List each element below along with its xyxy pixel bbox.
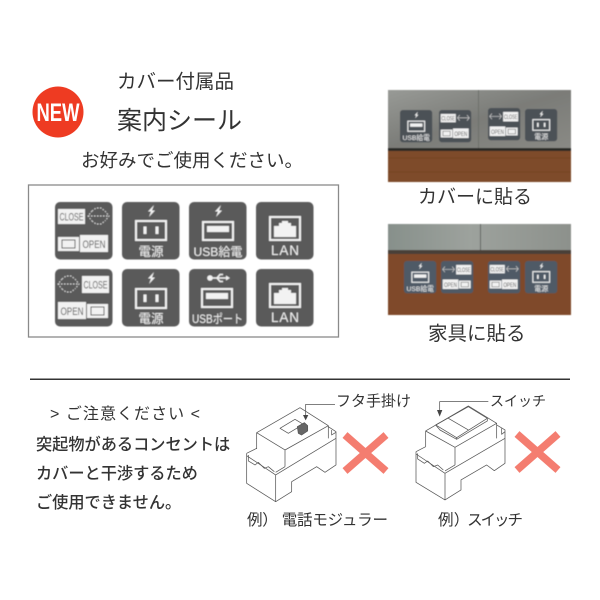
- sticker: close-left on cover: OPEN: [454, 131, 467, 138]
- caption: stick on cover: カバーに貼る: [418, 186, 532, 208]
- icon: USB port sticker: USBポート: [192, 312, 243, 326]
- icon: power sticker row 1: [122, 202, 180, 260]
- icon: close-left open-right sticker: OPEN: [82, 239, 106, 251]
- sticker: close-right on furniture: CLOSE: [457, 267, 470, 274]
- icon: close-left open-right sticker: [55, 202, 112, 260]
- photo: stickers on cover: [388, 90, 571, 182]
- sticker: close-right on furniture: [441, 261, 473, 293]
- icon: power sticker row 1: 電源: [138, 245, 164, 259]
- caption: telephone module example: 例） 電話モジュラー: [247, 511, 388, 529]
- icon: USB port sticker: [189, 269, 246, 326]
- heading: guide stickers: 案内シール: [117, 107, 242, 135]
- sticker: close-left on furniture: [488, 261, 520, 293]
- text: use as you like: お好みでご使用ください。: [81, 150, 303, 171]
- diagram: switch: [416, 402, 505, 500]
- sticker: power on furniture: 電源: [534, 284, 548, 293]
- label: lid finger catch: フタ手掛け: [336, 393, 411, 410]
- icon: red cross 2: [517, 434, 558, 470]
- sticker: USB power on cover: [400, 110, 432, 142]
- label: switch: スイッチ: [490, 393, 546, 409]
- icon: LAN sticker row 1: LAN: [271, 243, 299, 258]
- sticker: close-right on furniture: OPEN: [444, 282, 457, 289]
- icon: power sticker row 2: [122, 269, 180, 326]
- sticker: close-left on furniture: OPEN: [503, 282, 516, 289]
- icon: red cross 1: [345, 435, 386, 471]
- text: caution line 2: カバーと干渉するため: [36, 465, 198, 483]
- sticker: power on cover: 電源: [534, 132, 548, 141]
- sticker: close-left on cover: [439, 110, 471, 142]
- icon: close-left open-right sticker: CLOSE: [60, 212, 84, 224]
- heading: cover accessory: カバー付属品: [117, 71, 234, 93]
- panel: sticker sheet: [28, 185, 338, 337]
- sticker: close-left on furniture: CLOSE: [491, 266, 504, 273]
- sticker: close-right on cover: OPEN: [491, 129, 504, 136]
- sticker: USB power on furniture: [404, 261, 436, 293]
- icon: open-left close-right sticker: OPEN: [60, 306, 84, 318]
- sticker: power on furniture: [525, 261, 557, 293]
- icon: open-left close-right sticker: CLOSE: [84, 280, 108, 292]
- icon: LAN sticker row 2: LAN: [271, 310, 299, 325]
- text: caution line 1: 突起物があるコンセントは: [36, 435, 230, 454]
- icon: LAN sticker row 2: [256, 269, 314, 326]
- heading: caution: > ご注意ください <: [50, 405, 200, 423]
- sticker: close-right on cover: [488, 108, 520, 140]
- sticker: USB power on cover: USB給電: [403, 133, 430, 142]
- badge: NEW: [32, 86, 84, 138]
- icon: open-left close-right sticker: [55, 269, 112, 326]
- sticker: USB power on furniture: USB給電: [407, 284, 434, 293]
- sticker: power on cover: [525, 109, 557, 141]
- icon: USB power sticker: [189, 202, 246, 260]
- icon: USB power sticker: USB給電: [194, 245, 242, 259]
- text: caution line 3: ご使用できません。: [36, 494, 181, 512]
- sticker: close-right on cover: CLOSE: [504, 114, 517, 121]
- icon: LAN sticker row 1: [256, 202, 314, 260]
- caption: stick on furniture: 家具に貼る: [428, 323, 526, 345]
- diagram: phone module: [247, 404, 336, 502]
- caption: switch example: 例 ）スイッチ: [438, 511, 523, 529]
- badge: NEW: NEW: [36, 99, 80, 127]
- icon: power sticker row 2: 電源: [138, 312, 164, 326]
- photo: stickers on furniture: [388, 224, 571, 315]
- sticker: close-left on cover: CLOSE: [442, 115, 455, 122]
